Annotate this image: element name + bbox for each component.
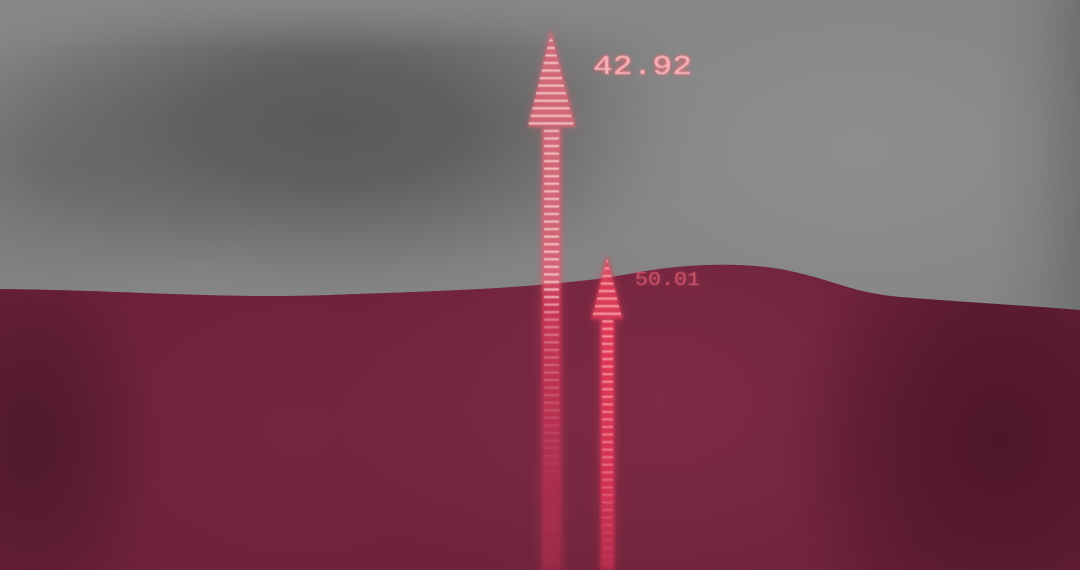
label: 50.01: 50.01 <box>635 269 700 291</box>
label: 42.92: 42.92 <box>593 53 692 83</box>
label: 50.01: 50.01 <box>635 269 700 291</box>
large arrow, value 42.92 <box>525 27 579 570</box>
crimson wave <box>0 265 1080 570</box>
label: 42.92: 42.92 <box>593 53 692 83</box>
small arrow, value 50.01 <box>590 253 624 570</box>
